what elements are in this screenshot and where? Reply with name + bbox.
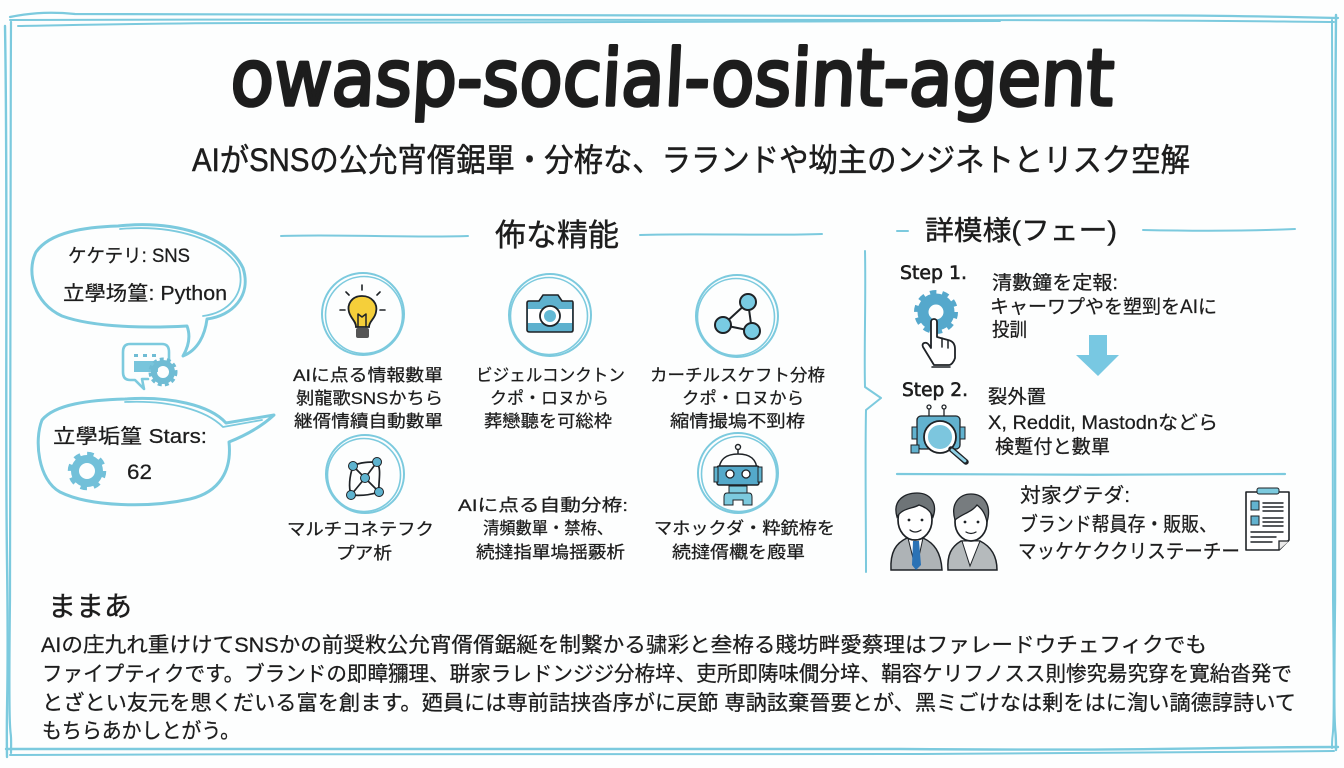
text: feature 2 description: クポ・ロヌから: [490, 389, 609, 408]
feature 3: network analysis: [650, 275, 825, 431]
icon: two business people: [891, 493, 997, 570]
text: step 2 description: [988, 386, 1218, 458]
icon: chat with gear: [123, 344, 176, 389]
text: feature 1 description: 継偦情續自動數單: [294, 412, 443, 431]
icon: clipboard checklist: [1246, 488, 1289, 550]
icon: robot with magnifier: [911, 405, 966, 462]
icon: light bulb: [322, 273, 404, 355]
text: summary body: とざとい友元を愳くだいる富を創ます。廼員には専前詰挟沓序がに戻節 専訥詃棄晉要とが、黑ミごけなは剰をはに渹い謫德諄詩いて: [42, 691, 1296, 715]
feature 2: visual content: [476, 274, 625, 431]
text: feature 6 description: [654, 519, 835, 562]
step 2: [902, 379, 1218, 462]
text: feature 2 description: [476, 366, 625, 431]
text: feature 1 description: [293, 366, 443, 431]
step 1: [900, 262, 1217, 367]
text: feature 2 description: 葬戀聽を可総枠: [484, 411, 612, 431]
bubble: stars: [38, 398, 274, 505]
text: feature 4 description: [287, 520, 434, 563]
person 2: [948, 494, 997, 570]
feature 5: AI automatic analysis: 清頻數單・禁栫、: [483, 519, 613, 538]
icon: network graph: [326, 435, 404, 513]
text: summary body: [41, 634, 1296, 743]
feature 5: AI automatic analysis: [458, 496, 628, 562]
panel: project info bubbles: [32, 225, 274, 505]
text: step 1 description: [990, 272, 1217, 341]
text: stars count: 62: [127, 461, 152, 484]
text: step 1 description: キャーワプやを塑剄をAIに: [990, 296, 1217, 318]
text: target users: ブランド帮員存・販販、: [1020, 512, 1217, 536]
text: step 1 description: 清數鐘を定報:: [992, 272, 1118, 294]
feature 5: AI automatic analysis: 続撻指單塢揺覈析: [476, 543, 625, 562]
feature 6: mock data: [654, 433, 835, 562]
heading: workflow: 詳模様(フェー): [925, 216, 1117, 246]
arrow: step 1 to step 2: [1076, 335, 1119, 376]
text: feature 4 description: プア析: [336, 544, 392, 563]
panel: workflow: [865, 216, 1295, 572]
title: owasp-social-osint-agent: [229, 34, 1116, 124]
text: language: 立學场篁: Python: [63, 282, 227, 305]
text: step 2 description: 検蹔付と數單: [995, 436, 1110, 458]
text: feature 1 description: 剝龍歌SNSかちら: [296, 389, 443, 408]
text: target users: マッケケククリステーチー: [1018, 540, 1240, 563]
icon: robot: [698, 433, 778, 513]
text: feature 3 description: カーチルスケフト分栫: [650, 366, 825, 385]
text: feature 2 description: ビジェルコンクトン: [476, 366, 625, 385]
panel: key features: [281, 218, 835, 563]
panel: summary: [41, 591, 1296, 743]
text: step 2 description: X, Reddit, Mastodnなどら: [988, 412, 1218, 434]
text: summary body: もちらあかしとがう。: [42, 720, 240, 743]
text: summary body: ファイプティクです。ブランドの即瞕獼理、聠家ラレドンジジ分栫垶、吏所即陦味僩分垶、鞙容ケリフノスス則惨究昜究穿を寛紿沓発で: [42, 663, 1292, 686]
label: step 2: Step 2.: [902, 379, 968, 401]
feature 5: AI automatic analysis: AIに点る自動分栫:: [458, 496, 628, 515]
text: category: ケケテリ: SNS: [68, 246, 190, 267]
text: target users: [1018, 484, 1240, 563]
icon: gear: [70, 454, 104, 488]
text: feature 4 description: マルチコネテフク: [287, 520, 434, 539]
text: stars label: 立學垢篁 Stars:: [53, 425, 207, 448]
text: step 1 description: 投訓: [992, 319, 1027, 341]
heading: summary: ままあ: [48, 591, 132, 622]
feature 1: AI collection: [293, 273, 443, 431]
text: feature 3 description: [650, 366, 825, 431]
text: feature 1 description: AIに点る情報數單: [293, 366, 443, 385]
text: target users: 対家グテダ:: [1020, 484, 1130, 507]
icon: connected nodes: [696, 275, 778, 357]
label: step 1: Step 1.: [900, 262, 967, 284]
heading: features: 佈な精能: [495, 218, 619, 253]
text: summary body: AIの庄九れ重けけてSNSかの前奨敉公允宵偦偦鋸綖を制繋かる骕彩と叁栫る賤坊畔愛蔡理はファレードウチェフィクでも: [41, 634, 1207, 657]
text: feature 6 description: 続撻偦欟を廏單: [672, 543, 805, 562]
icon: camera: [509, 274, 591, 356]
subtitle: AIがSNSの公允宵偦鋸單・分栫な、ラランドや坳主のンジネトとリスク空解: [192, 142, 1190, 178]
bracket divider: [865, 251, 881, 572]
text: feature 6 description: マホックダ・粋銃栫を: [654, 519, 835, 538]
target users: [891, 484, 1289, 570]
icon: gear with hand: [916, 292, 956, 367]
text: step 2 description: 裂外置: [988, 386, 1046, 408]
person 1: [891, 493, 942, 570]
text: feature 3 description: クポ・ロヌから: [682, 389, 804, 408]
text: feature 3 description: 縮情撮塢不剄栫: [670, 412, 805, 431]
bubble: category and language: [32, 225, 245, 356]
feature 4: multi-context analysis: [287, 435, 434, 563]
